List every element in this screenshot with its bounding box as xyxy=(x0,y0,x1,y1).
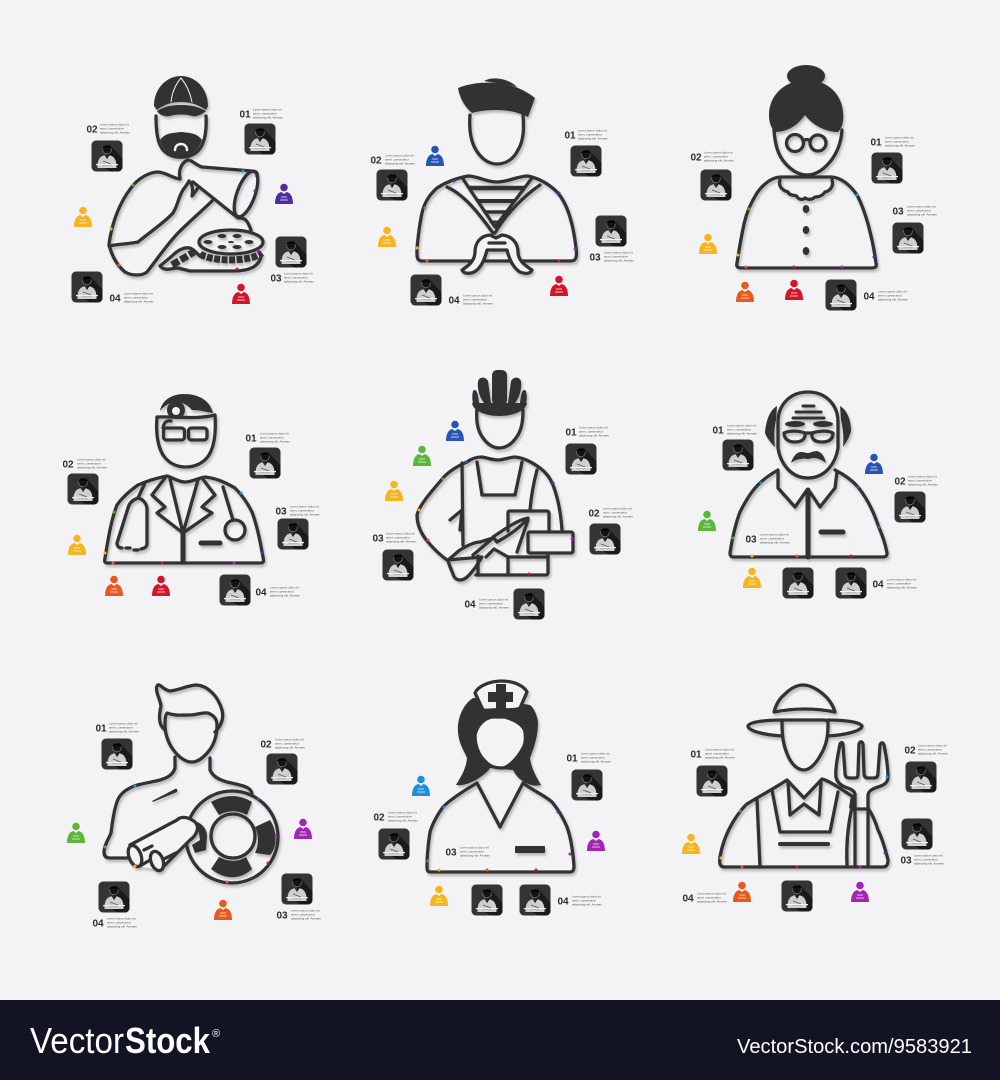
label 04: amet, consectetur xyxy=(463,298,487,302)
label 03: 03 xyxy=(745,534,757,546)
label 04: 04 xyxy=(863,292,875,302)
label 01: Lorem ipsum dolor sit xyxy=(260,432,289,436)
label 04: Lorem ipsum dolor sit xyxy=(878,290,907,294)
icon: orange person xyxy=(733,882,751,902)
label 02: amet, consectetur xyxy=(100,126,124,130)
connector dots xyxy=(104,492,264,564)
label 02: 02 xyxy=(370,156,382,166)
panel: doctor xyxy=(62,394,320,606)
label 01: Lorem ipsum dolor sit xyxy=(727,424,756,428)
label 01: 01 xyxy=(712,426,724,436)
figure: builder with trowel and bricks xyxy=(417,370,573,580)
label 01: 01 xyxy=(690,750,702,760)
label 02: Lorem ipsum dolor sit xyxy=(275,738,304,742)
tile icon 04 xyxy=(72,272,103,303)
connector dots xyxy=(104,784,278,884)
label 03: adipiscing elit. Aenean xyxy=(386,540,416,544)
label 01: amet, consectetur xyxy=(109,726,133,730)
label 03: 03 xyxy=(892,206,904,218)
label 02: amet, consectetur xyxy=(704,154,728,158)
tile icon 04 xyxy=(836,568,867,599)
label 01: amet, consectetur xyxy=(579,430,603,434)
label 02: amet, consectetur xyxy=(77,462,101,466)
label 02: Lorem ipsum dolor sit xyxy=(388,810,417,814)
label 04: 04 xyxy=(109,294,121,304)
label 02: Lorem ipsum dolor sit xyxy=(100,122,129,126)
label 02 xyxy=(894,474,938,488)
label 04: 04 xyxy=(682,894,694,904)
icon: yellow person xyxy=(430,886,448,906)
label 02: adipiscing elit. Aenean xyxy=(77,466,107,470)
label 02: 02 xyxy=(690,152,702,164)
label 04: 04 xyxy=(464,600,476,610)
label 04: 04 xyxy=(557,896,569,908)
connector dots xyxy=(110,170,260,270)
tile icon 02 xyxy=(266,754,298,785)
label 02: Lorem ipsum dolor sit xyxy=(385,154,414,158)
icon: blue person xyxy=(446,421,464,441)
tile icon 04 xyxy=(782,880,813,912)
label 03 xyxy=(275,504,320,518)
label 04 xyxy=(464,598,509,610)
label 01: amet, consectetur xyxy=(705,752,729,756)
panel: nurse xyxy=(373,681,611,916)
label 03: amet, consectetur xyxy=(290,508,314,512)
label 02: amet, consectetur xyxy=(908,478,932,482)
label 03: 03 xyxy=(270,274,282,284)
label 02 xyxy=(62,458,107,470)
label 03: amet, consectetur xyxy=(914,858,938,862)
logo: ® xyxy=(212,1028,220,1040)
label 03: amet, consectetur xyxy=(460,850,484,854)
label 03: Lorem ipsum dolor sit xyxy=(914,854,943,858)
tile icon 02 xyxy=(590,524,621,555)
label 02: 02 xyxy=(588,508,600,520)
label 03: 03 xyxy=(372,534,384,544)
label 03: amet, consectetur xyxy=(760,536,784,540)
tile icon 03 xyxy=(782,568,814,599)
tile icon 02 xyxy=(906,762,937,793)
icon: green person xyxy=(698,511,716,531)
label 01: adipiscing elit. Aenean xyxy=(705,756,735,760)
label 02: 02 xyxy=(373,812,385,824)
label 04: amet, consectetur xyxy=(697,896,721,900)
label 02: amet, consectetur xyxy=(918,748,942,752)
label 03: 03 xyxy=(445,848,457,858)
label 02: adipiscing elit. Aenean xyxy=(918,752,948,756)
label 03 xyxy=(276,908,321,922)
icon: purple person xyxy=(275,184,293,204)
label 03: 03 xyxy=(276,910,288,922)
label 04: amet, consectetur xyxy=(887,582,911,586)
tile icon 01 xyxy=(722,440,754,471)
label 04: adipiscing elit. Aenean xyxy=(270,594,300,598)
tile icon 03 xyxy=(282,874,313,905)
tile icon 01 xyxy=(566,444,597,475)
label 04: Lorem ipsum dolor sit xyxy=(572,894,601,898)
icon: orange person xyxy=(736,282,754,302)
logo: Vector xyxy=(30,1020,124,1061)
label 03: amet, consectetur xyxy=(386,536,410,540)
label 01: adipiscing elit. Aenean xyxy=(578,136,608,140)
label 04 xyxy=(92,916,137,930)
tile icon 04 xyxy=(98,882,130,913)
icon: orange person xyxy=(105,576,123,596)
tile icon 01 xyxy=(250,448,281,479)
label 01 xyxy=(566,752,611,764)
label 02: Lorem ipsum dolor sit xyxy=(908,474,937,478)
logo: Stock xyxy=(125,1020,211,1061)
label 01: 01 xyxy=(566,754,578,764)
label 04: 04 xyxy=(448,296,460,306)
label 01 xyxy=(95,722,139,734)
label 01: 01 xyxy=(239,110,251,120)
tile icon 04 xyxy=(520,884,551,916)
label 03: Lorem ipsum dolor sit xyxy=(290,504,319,508)
tile icon 02 xyxy=(378,828,410,860)
label 04: Lorem ipsum dolor sit xyxy=(124,292,153,296)
connector dots xyxy=(416,180,576,262)
icon: green person xyxy=(413,446,431,466)
label 04: 04 xyxy=(255,588,267,598)
label 01 xyxy=(565,426,609,438)
label 03 xyxy=(900,854,944,866)
tile icon 04 xyxy=(220,574,251,606)
label 03 xyxy=(589,250,634,264)
icon: yellow person xyxy=(682,834,700,854)
label 04: adipiscing elit. Aenean xyxy=(463,302,493,306)
label 02 xyxy=(690,150,734,164)
label 01: adipiscing elit. Aenean xyxy=(253,116,283,120)
icon: magenta person xyxy=(294,819,312,839)
label 01: adipiscing elit. Aenean xyxy=(885,144,915,148)
label 04: Lorem ipsum dolor sit xyxy=(463,294,492,298)
label 02: adipiscing elit. Aenean xyxy=(908,482,938,486)
label 03: amet, consectetur xyxy=(284,276,308,280)
label 04: adipiscing elit. Aenean xyxy=(887,586,917,590)
label 01: Lorem ipsum dolor sit xyxy=(109,722,138,726)
icon: red person xyxy=(152,576,170,596)
figure: bald man with moustache xyxy=(730,392,887,557)
label 01 xyxy=(690,748,735,760)
figure: bearded man with megaphone and film reel xyxy=(109,76,263,275)
label 03: Lorem ipsum dolor sit xyxy=(907,204,936,208)
figure: sailor xyxy=(417,78,576,273)
label 04 xyxy=(863,290,908,302)
label 04: amet, consectetur xyxy=(572,898,596,902)
label 01: 01 xyxy=(565,428,577,438)
tile icon 02 xyxy=(894,492,926,523)
label 03: adipiscing elit. Aenean xyxy=(760,540,790,544)
label 04: 04 xyxy=(92,918,104,930)
label 02 xyxy=(373,810,418,824)
label 03 xyxy=(745,532,790,546)
tile icon 03 xyxy=(278,518,309,550)
tile icon 04 xyxy=(410,274,442,306)
tile icon 04 xyxy=(514,588,545,620)
label 01: 01 xyxy=(870,138,882,148)
label 01: amet, consectetur xyxy=(578,132,602,136)
label 01: Lorem ipsum dolor sit xyxy=(581,752,610,756)
label 04: amet, consectetur xyxy=(878,294,902,298)
connector dots xyxy=(736,194,876,268)
tile icon 02 xyxy=(92,140,123,172)
label 02 xyxy=(904,744,948,756)
label 04: adipiscing elit. Aenean xyxy=(572,902,602,906)
tile icon 01 xyxy=(244,124,276,155)
panel: builder xyxy=(372,370,633,620)
label 02: Lorem ipsum dolor sit xyxy=(77,458,106,462)
tile icon 02 xyxy=(376,170,408,201)
label 01: adipiscing elit. Aenean xyxy=(109,730,139,734)
label 03: 03 xyxy=(275,506,287,518)
panel: film director xyxy=(72,76,314,304)
icon: magenta person xyxy=(587,831,605,851)
tile icon 02 xyxy=(68,474,99,505)
label 01 xyxy=(712,424,757,436)
tile icon 03 xyxy=(902,818,933,850)
icon: red person xyxy=(550,276,568,296)
label 01 xyxy=(564,128,608,142)
tile icon 01 xyxy=(572,770,603,801)
label 04 xyxy=(557,894,602,908)
label 01: amet, consectetur xyxy=(885,140,909,144)
figure: nurse xyxy=(427,681,574,872)
label 02: 02 xyxy=(86,124,98,136)
icon: red person xyxy=(232,284,250,304)
icon: yellow person xyxy=(74,207,92,227)
label 01: amet, consectetur xyxy=(581,756,605,760)
footer bar xyxy=(0,1000,1000,1080)
label 03: amet, consectetur xyxy=(604,254,628,258)
label 01: 01 xyxy=(245,434,257,444)
panel: lifeguard xyxy=(67,685,321,930)
label 04 xyxy=(255,586,300,598)
icon: yellow person xyxy=(378,227,396,247)
icon: yellow person xyxy=(743,568,761,588)
tile icon 03 xyxy=(596,216,627,247)
label 01: Lorem ipsum dolor sit xyxy=(578,128,607,132)
panel: farmer xyxy=(682,685,948,912)
connector dots xyxy=(426,806,572,872)
label 04: Lorem ipsum dolor sit xyxy=(107,916,136,920)
label 02: amet, consectetur xyxy=(603,510,627,514)
label 02: 02 xyxy=(904,746,916,756)
label 04: Lorem ipsum dolor sit xyxy=(270,586,299,590)
panel: sailor xyxy=(370,78,634,306)
image id url: VectorStock.com/9583921 xyxy=(737,1036,972,1058)
connector dots xyxy=(732,482,880,558)
tile icon 01 xyxy=(570,146,602,177)
label 01 xyxy=(245,432,290,444)
label 03: amet, consectetur xyxy=(907,208,931,212)
figure: doctor xyxy=(105,394,264,563)
label 03: Lorem ipsum dolor sit xyxy=(760,532,789,536)
label 01: Lorem ipsum dolor sit xyxy=(885,136,914,140)
label 04: amet, consectetur xyxy=(124,296,148,300)
label 02: amet, consectetur xyxy=(275,742,299,746)
label 01 xyxy=(870,136,915,148)
icon: magenta person xyxy=(851,882,869,902)
label 01: amet, consectetur xyxy=(727,428,751,432)
label 03 xyxy=(445,846,490,858)
figure: lifeguard with binoculars and lifebuoy xyxy=(104,685,278,883)
tile icon 03 xyxy=(276,236,307,268)
label 04 xyxy=(872,578,917,590)
icon: yellow person xyxy=(68,535,86,555)
label 01: adipiscing elit. Aenean xyxy=(581,760,611,764)
figure: grandmother xyxy=(737,65,876,268)
panel: old man xyxy=(698,392,938,599)
label 04: adipiscing elit. Aenean xyxy=(697,900,727,904)
label 03: adipiscing elit. Aenean xyxy=(284,280,314,284)
label 03: amet, consectetur xyxy=(291,912,315,916)
connector dots xyxy=(418,460,574,576)
label 02 xyxy=(370,154,415,166)
label 03: 03 xyxy=(900,856,912,866)
label 01: Lorem ipsum dolor sit xyxy=(253,108,282,112)
label 04 xyxy=(109,292,154,304)
label 03: Lorem ipsum dolor sit xyxy=(284,272,313,276)
label 02 xyxy=(588,506,633,520)
label 02: Lorem ipsum dolor sit xyxy=(704,150,733,154)
tile icon 02 xyxy=(700,170,732,201)
label 03: adipiscing elit. Aenean xyxy=(460,854,490,858)
label 02: Lorem ipsum dolor sit xyxy=(918,744,947,748)
label 03 xyxy=(270,272,314,284)
label 03: adipiscing elit. Aenean xyxy=(291,916,321,920)
label 03: Lorem ipsum dolor sit xyxy=(604,250,633,254)
panel: grandmother xyxy=(690,65,937,311)
label 02: amet, consectetur xyxy=(385,158,409,162)
tile icon 03 xyxy=(382,550,414,581)
tile icon 01 xyxy=(696,766,728,797)
label 03 xyxy=(892,204,937,218)
label 02: adipiscing elit. Aenean xyxy=(100,130,130,134)
icon: yellow person xyxy=(385,481,403,501)
icon: red person xyxy=(785,280,803,300)
icon: yellow person xyxy=(699,234,717,254)
label 01: 01 xyxy=(564,130,576,142)
label 01: Lorem ipsum dolor sit xyxy=(579,426,608,430)
icon: orange person xyxy=(214,900,232,920)
label 02: 02 xyxy=(62,460,74,470)
label 01 xyxy=(239,108,283,120)
label 02 xyxy=(260,738,305,750)
label 01: 01 xyxy=(95,724,107,734)
label 02: adipiscing elit. Aenean xyxy=(388,818,418,822)
label 01: Lorem ipsum dolor sit xyxy=(705,748,734,752)
label 02: 02 xyxy=(260,740,272,750)
label 04 xyxy=(682,892,727,904)
label 01: adipiscing elit. Aenean xyxy=(579,434,609,438)
tile icon 04 xyxy=(826,280,857,311)
label 02: adipiscing elit. Aenean xyxy=(385,162,415,166)
label 04 xyxy=(448,294,493,306)
label 04: amet, consectetur xyxy=(107,920,131,924)
label 04: adipiscing elit. Aenean xyxy=(124,300,154,304)
label 02: amet, consectetur xyxy=(388,814,412,818)
label 03: Lorem ipsum dolor sit xyxy=(460,846,489,850)
label 01: adipiscing elit. Aenean xyxy=(727,432,757,436)
label 04: Lorem ipsum dolor sit xyxy=(697,892,726,896)
label 03: adipiscing elit. Aenean xyxy=(907,212,937,216)
label 03: adipiscing elit. Aenean xyxy=(914,862,944,866)
label 04: amet, consectetur xyxy=(270,590,294,594)
tile icon 03 xyxy=(472,884,503,916)
label 03: Lorem ipsum dolor sit xyxy=(386,532,415,536)
logo xyxy=(30,1020,220,1061)
label 02: 02 xyxy=(894,476,906,488)
label 02: Lorem ipsum dolor sit xyxy=(603,506,632,510)
label 04: 04 xyxy=(872,580,884,590)
icon: blue person xyxy=(865,454,883,474)
label 04: amet, consectetur xyxy=(479,602,503,606)
label 02 xyxy=(86,122,130,136)
icon: green person xyxy=(67,823,85,843)
label 03: adipiscing elit. Aenean xyxy=(290,512,320,516)
label 01: adipiscing elit. Aenean xyxy=(260,440,290,444)
connector dots xyxy=(720,776,888,868)
label 01: amet, consectetur xyxy=(253,112,277,116)
label 03 xyxy=(372,532,416,544)
figure: farmer with pitchfork xyxy=(720,685,888,867)
label 04: Lorem ipsum dolor sit xyxy=(479,598,508,602)
icon: blue person xyxy=(412,776,430,796)
tile icon 03 xyxy=(892,222,924,254)
label 04: adipiscing elit. Aenean xyxy=(479,606,509,610)
label 04: adipiscing elit. Aenean xyxy=(107,924,137,928)
label 02: adipiscing elit. Aenean xyxy=(603,514,633,518)
label 01: amet, consectetur xyxy=(260,436,284,440)
label 03: 03 xyxy=(589,252,601,264)
label 02: adipiscing elit. Aenean xyxy=(275,746,305,750)
tile icon 01 xyxy=(872,152,903,184)
label 03: Lorem ipsum dolor sit xyxy=(291,908,320,912)
label 02: adipiscing elit. Aenean xyxy=(704,158,734,162)
label 03: adipiscing elit. Aenean xyxy=(604,258,634,262)
label 04: Lorem ipsum dolor sit xyxy=(887,578,916,582)
tile icon 01 xyxy=(102,738,133,770)
label 04: adipiscing elit. Aenean xyxy=(878,298,908,302)
icon: blue person xyxy=(426,146,444,166)
